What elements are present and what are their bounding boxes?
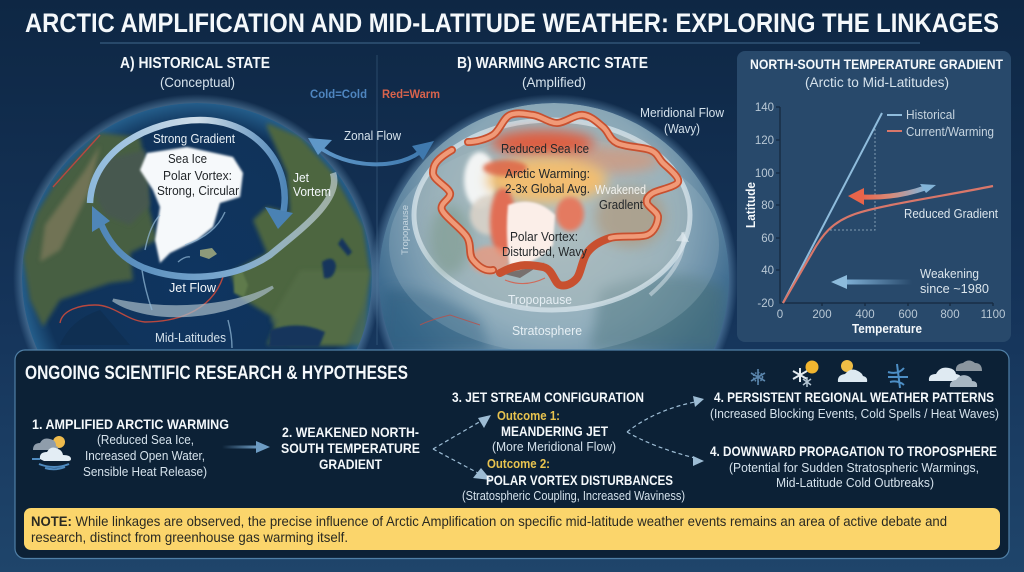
arrow: zonal flow between globes <box>308 138 434 164</box>
axis title: temperature: Temperature <box>852 322 922 336</box>
step 1: amplified arctic warming: Increased Open Water, <box>85 448 205 463</box>
step 4: persistent weather patterns <box>710 389 999 421</box>
step 1: amplified arctic warming: (Reduced Sea Ice, <box>97 432 194 447</box>
line chart <box>744 102 1005 336</box>
x axis tick labels: 0 <box>777 309 783 321</box>
label: jet vortem: Jet <box>293 170 309 185</box>
panel: temperature gradient chart <box>737 51 1011 342</box>
label: polar vortex disturbed: Disturbed, Wavy <box>502 244 587 259</box>
label: zonal flow: Zonal Flow <box>344 128 402 143</box>
y axis tick labels: 120 <box>755 135 774 147</box>
chart legend: Historical <box>906 108 955 122</box>
x axis tick labels: 400 <box>855 309 875 321</box>
step 1: amplified arctic warming <box>32 416 229 479</box>
step 2: weakened gradient: SOUTH TEMPERATURE <box>281 440 420 456</box>
note callout <box>24 508 1000 550</box>
mid-latitude red current <box>53 135 223 323</box>
icon: sun behind cloud <box>838 360 867 382</box>
label: polar vortex strong: Strong, Circular <box>157 183 240 198</box>
step 2: weakened gradient: 2. WEAKENED NORTH- <box>282 424 419 440</box>
legend: warm: Red=Warm <box>382 87 440 101</box>
jet stream arrow: upper arc <box>90 120 293 229</box>
heading: historical state <box>120 55 270 90</box>
label: polar vortex strong <box>157 168 240 198</box>
label: weakening since 1980 <box>920 267 989 296</box>
arrows: step 3 to step 4 <box>627 396 704 466</box>
icon: clouds <box>929 360 982 387</box>
chart legend <box>887 108 994 139</box>
label: strong gradient: Strong Gradient <box>153 131 235 146</box>
series: current warming <box>783 186 993 303</box>
note callout: research, distinct from greenhouse gas warming itself. <box>31 529 348 545</box>
x axis tick labels: 800 <box>940 309 960 321</box>
heading: historical state: A) HISTORICAL STATE <box>120 55 270 72</box>
heading: warming arctic state: B) WARMING ARCTIC STATE <box>457 55 648 72</box>
icon: snowflake <box>751 369 765 385</box>
step 4: downward propagation <box>710 443 997 490</box>
label: jet vortem <box>293 170 331 199</box>
label: jet vortem: Vortem <box>293 184 331 199</box>
label: rotated tropopause: Tropopause <box>400 205 410 255</box>
y axis tick labels <box>755 102 774 310</box>
outcome 2: Outcome 2: <box>487 457 550 471</box>
x axis tick labels <box>777 309 1005 321</box>
axis title: latitude: Latitude <box>744 182 758 228</box>
y axis tick labels: 40 <box>761 265 774 277</box>
heading: warming arctic state: (Amplified) <box>522 74 586 90</box>
research heading: ONGOING SCIENTIFIC RESEARCH & HYPOTHESES <box>25 363 408 384</box>
arrow: red to blue shift <box>848 184 936 205</box>
chart heading <box>750 56 1003 90</box>
label: reduced gradient: Reduced Gradient <box>904 207 998 221</box>
label: sea ice: Sea Ice <box>168 151 207 166</box>
label: reduced sea ice: Reduced Sea Ice <box>501 141 589 156</box>
panel: warming arctic globe <box>372 56 736 350</box>
outcome 1: MEANDERING JET <box>501 423 608 439</box>
label: weakened gradient <box>595 182 646 212</box>
label: meridional flow: (Wavy) <box>664 121 700 136</box>
y axis tick labels: 60 <box>761 233 774 245</box>
label: stratosphere: Stratosphere <box>512 323 582 338</box>
x axis tick labels: 1100 <box>981 309 1005 321</box>
step 1: amplified arctic warming: 1. AMPLIFIED ARCTIC WARMING <box>32 416 229 432</box>
step 3: jet stream configuration: 3. JET STREAM CONFIGURATION <box>452 389 644 405</box>
panel: historical state globe <box>14 56 379 350</box>
outcome 2 <box>462 457 685 503</box>
icon: cloud, sun and wind <box>32 436 71 469</box>
arrow: step 1 to step 2 <box>222 441 270 453</box>
arrow: weakening <box>831 275 912 289</box>
x axis tick labels: 200 <box>812 309 832 321</box>
step 4: persistent weather patterns: (Increased Blocking Events, Cold Spells / Heat Waves) <box>710 406 999 421</box>
icon: wind and snow <box>888 364 908 388</box>
label: meridional flow <box>640 105 725 136</box>
label: weakening since 1980: Weakening <box>920 267 979 281</box>
label: weakening since 1980: since ~1980 <box>920 282 989 296</box>
icon: snow and sun <box>793 360 818 387</box>
y axis tick labels: 140 <box>755 102 774 114</box>
heading: warming arctic state <box>457 55 648 90</box>
globe A: earth with land and sea ice <box>22 103 372 350</box>
x axis tick labels: 600 <box>898 309 918 321</box>
chart heading: (Arctic to Mid-Latitudes) <box>805 75 949 90</box>
label: jet flow: Jet Flow <box>169 280 217 295</box>
label: polar vortex strong: Polar Vortex: <box>163 168 232 183</box>
jet stream arrow: lower arc <box>92 173 334 277</box>
outcome 2: POLAR VORTEX DISTURBANCES <box>486 472 673 488</box>
label: weakened gradient: Wvakened <box>595 182 646 197</box>
label: arctic warming: 2-3x Global Avg. <box>505 181 590 196</box>
step 1: amplified arctic warming: Sensible Heat Release) <box>83 464 207 479</box>
wavy polar vortex jet <box>433 113 678 286</box>
y axis tick labels: -20 <box>757 298 774 310</box>
y axis tick labels: 100 <box>755 168 774 180</box>
step 3: jet stream configuration <box>452 389 685 503</box>
label: arctic warming <box>505 166 590 196</box>
label: mid-latitudes: Mid-Latitudes <box>155 330 226 345</box>
arrows: step 2 to outcomes <box>433 415 491 480</box>
chart legend: Current/Warming <box>906 125 994 139</box>
label: weakened gradient: Gradlent <box>599 197 643 212</box>
label: polar vortex disturbed <box>502 229 587 259</box>
label: tropopause: Tropopause <box>508 292 572 307</box>
heading: historical state: (Conceptual) <box>160 74 235 90</box>
note callout: NOTE: While linkages are observed, the precise influence of Arctic Amplification on specific mid-latitude weather events remains an area of active debate and <box>31 513 947 529</box>
axes <box>776 107 993 306</box>
panel: ongoing research <box>15 350 1009 558</box>
step 4: downward propagation: Mid-Latitude Cold Outbreaks) <box>776 475 934 490</box>
outcome 1 <box>492 409 616 454</box>
legend: cold: Cold=Cold <box>310 87 367 101</box>
step 2: weakened gradient: GRADIENT <box>319 456 382 472</box>
y axis tick labels: 80 <box>761 200 774 212</box>
outcome 2: (Stratospheric Coupling, Increased Waviness) <box>462 489 685 503</box>
outcome 1: (More Meridional Flow) <box>492 439 616 454</box>
label: meridional flow: Meridional Flow <box>640 105 725 120</box>
weather icons row <box>751 360 982 388</box>
label: arctic warming: Arctic Warming: <box>505 166 590 181</box>
step 2: weakened gradient <box>281 424 420 472</box>
label: polar vortex disturbed: Polar Vortex: <box>510 229 578 244</box>
series: historical <box>783 113 882 303</box>
step 4: downward propagation: (Potential for Sudden Stratospheric Warmings, <box>729 460 979 475</box>
globe B: warming earth with atmosphere layers <box>380 103 728 350</box>
outcome 1: Outcome 1: <box>497 409 560 423</box>
